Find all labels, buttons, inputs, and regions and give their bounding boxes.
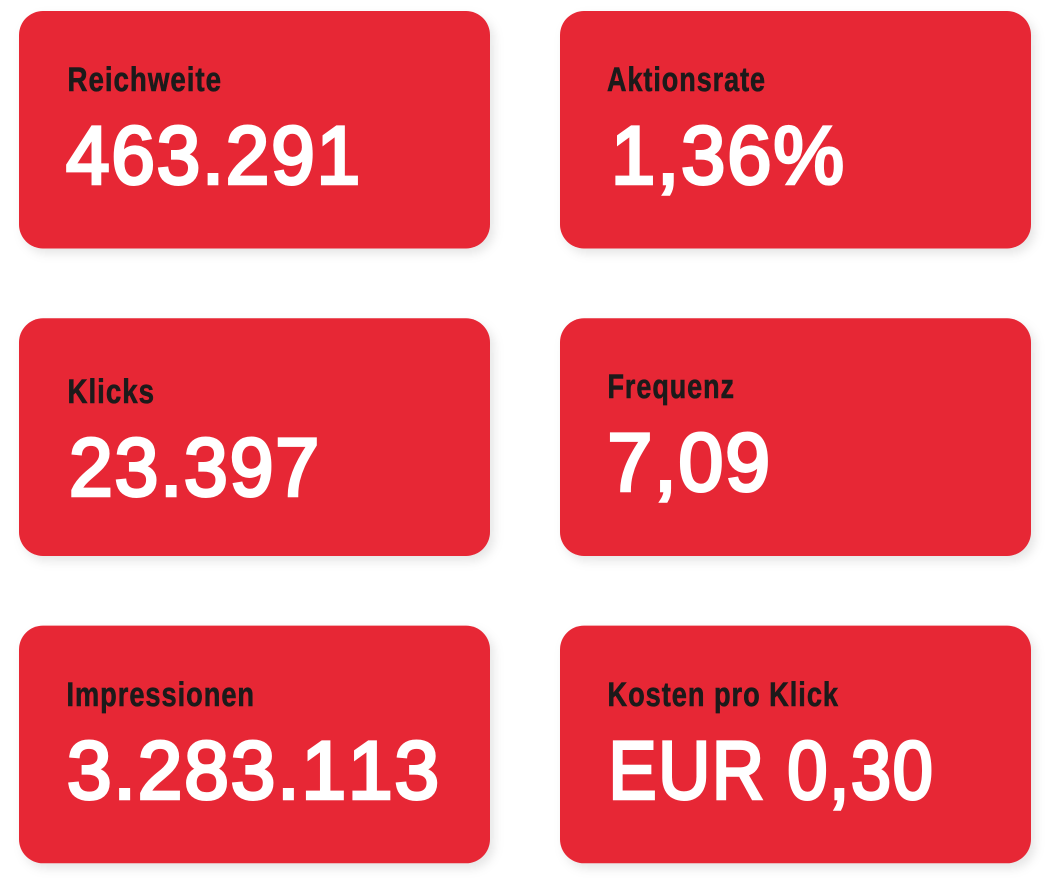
value: EUR 0,30: EUR 0,30 <box>608 725 934 816</box>
value: 1,36%: 1,36% <box>611 110 846 201</box>
panel: Reichweite <box>19 11 490 248</box>
panel: Kosten pro Klick <box>560 626 1031 863</box>
value: 463.291: 463.291 <box>66 110 362 201</box>
panel: Impressionen <box>19 626 490 863</box>
value: 3.283.113: 3.283.113 <box>67 725 441 816</box>
label: Kosten pro Klick: Kosten pro Klick <box>608 676 839 714</box>
label: Klicks: Klicks <box>68 373 155 411</box>
panel: Frequenz <box>560 318 1031 556</box>
panel: Klicks <box>19 318 490 556</box>
value: 7,09: 7,09 <box>608 417 772 508</box>
value: 23.397: 23.397 <box>69 422 321 513</box>
panel: Aktionsrate <box>560 11 1031 248</box>
label: Impressionen: Impressionen <box>66 676 255 714</box>
label: Aktionsrate: Aktionsrate <box>607 61 766 99</box>
label: Reichweite: Reichweite <box>68 61 222 99</box>
label: Frequenz: Frequenz <box>608 368 735 406</box>
